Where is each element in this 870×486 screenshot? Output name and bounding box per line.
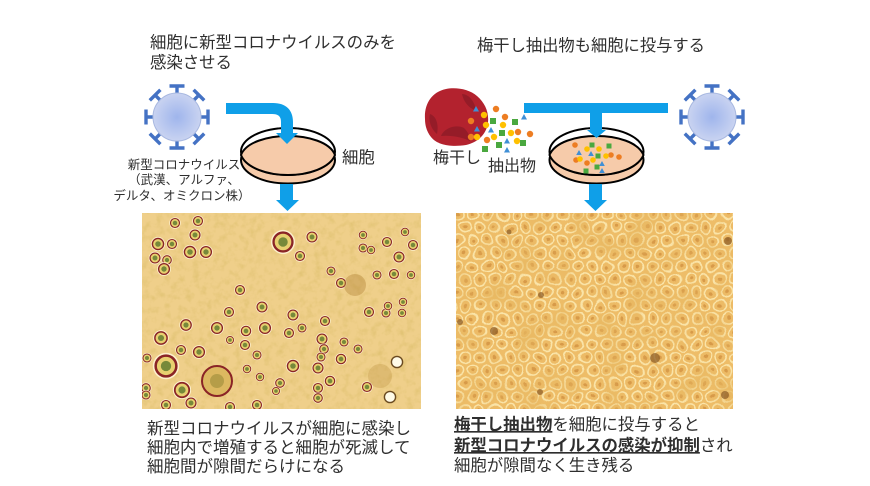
arrow: dish to micrograph left bbox=[276, 184, 299, 211]
icon: culture dish left bbox=[241, 128, 335, 184]
icon: umeboshi plum bbox=[425, 88, 488, 146]
heading: left condition bbox=[150, 34, 396, 72]
caption: left result bbox=[147, 419, 411, 476]
label: virus strains: デルタ、オミクロン株） bbox=[113, 188, 251, 203]
caption: right result bbox=[454, 415, 733, 475]
caption: right result: 細胞が隙間なく生き残る bbox=[454, 457, 634, 475]
arrow: virus to dish bbox=[226, 103, 298, 144]
icon: extract particles bbox=[468, 106, 533, 152]
icon: extract particles in dish bbox=[572, 142, 622, 174]
caption: left result: 新型コロナウイルスが細胞に感染し bbox=[147, 419, 411, 438]
icon: coronavirus right bbox=[681, 86, 743, 148]
large rounded dead cell bbox=[202, 366, 232, 396]
label: virus strains: （武漢、アルファ、 bbox=[128, 173, 240, 187]
caption: right result: 新型コロナウイルスの感染が抑制され bbox=[454, 436, 733, 455]
arrow: T-shaped from virus and extract bbox=[524, 103, 668, 138]
micrograph: infected cells bbox=[140, 213, 421, 413]
micrograph: protected cells bbox=[456, 213, 733, 409]
label: virus strains bbox=[113, 158, 251, 203]
icon: coronavirus left bbox=[146, 86, 208, 148]
label: cells: 細胞 bbox=[342, 149, 375, 167]
caption: right result: 梅干し抽出物を細胞に投与すると bbox=[454, 415, 700, 434]
rounded dead cells bbox=[140, 215, 419, 413]
icon: culture dish right bbox=[550, 128, 644, 184]
label: extract: 抽出物 bbox=[488, 157, 536, 175]
heading: right condition: 梅干し抽出物も細胞に投与する bbox=[477, 37, 705, 55]
heading: left condition: 感染させる bbox=[150, 54, 232, 72]
caption: left result: 細胞内で増殖すると細胞が死滅して bbox=[147, 438, 411, 457]
label: virus strains: 新型コロナウイルス bbox=[128, 158, 240, 172]
arrow: dish to micrograph right bbox=[584, 184, 607, 211]
scattered dark cells bbox=[457, 230, 732, 399]
label: umeboshi: 梅干し bbox=[433, 149, 481, 167]
caption: left result: 細胞間が隙間だらけになる bbox=[147, 457, 345, 476]
heading: left condition: 細胞に新型コロナウイルスのみを bbox=[150, 34, 396, 52]
